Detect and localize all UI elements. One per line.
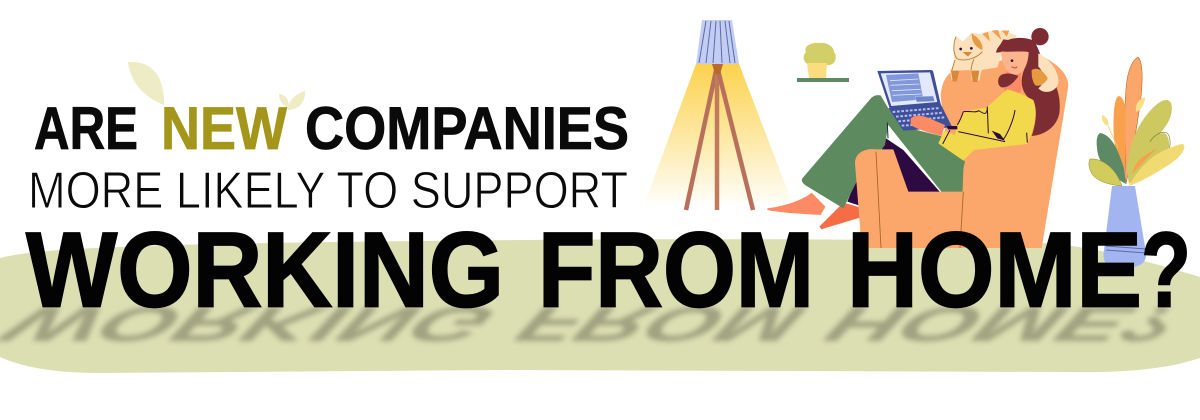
chair arm right	[961, 137, 1042, 248]
title line 3	[26, 210, 1191, 330]
title line 3: HOME	[847, 210, 1142, 330]
armchair, woman, cat, laptop	[767, 55, 1068, 248]
title reflection	[0, 297, 1200, 352]
decorative pale leaves	[128, 62, 305, 110]
laptop	[877, 70, 952, 131]
green leaf	[1097, 133, 1126, 184]
tail curled on chair	[1038, 53, 1059, 92]
green trousers	[802, 95, 965, 208]
pale yellow right leaf	[1129, 144, 1184, 186]
orange accent on leaf	[1132, 148, 1157, 174]
yellow sweater	[938, 89, 1035, 161]
olive round leaf outline	[1150, 132, 1170, 150]
yellow-olive left leaf	[1089, 159, 1122, 186]
chair back	[941, 55, 1068, 248]
title line 1: COMPANIES	[305, 95, 629, 162]
vase body	[1103, 186, 1146, 267]
olive large leaf	[1127, 100, 1172, 184]
title line 1	[34, 95, 629, 162]
hair bun	[1031, 28, 1049, 45]
floor lamp	[645, 20, 792, 210]
title reflection: HOME	[806, 297, 1152, 352]
shelf with potted plant	[797, 43, 849, 82]
face	[1001, 50, 1029, 75]
feet	[767, 193, 825, 215]
lamp shade	[696, 20, 739, 64]
lamp legs	[686, 66, 753, 210]
chair arm left	[855, 149, 963, 248]
title reflection: FROM	[497, 297, 824, 352]
orange tall leaf	[1125, 57, 1142, 184]
small buds	[1136, 97, 1145, 112]
dark trouser lining	[847, 178, 867, 206]
hand	[911, 116, 945, 136]
lamp light cone	[645, 64, 792, 202]
vase plant	[1089, 57, 1184, 267]
woman's hair, back	[996, 38, 1060, 136]
title line 1: ARE	[34, 95, 138, 162]
sleeve cuff hint	[947, 126, 957, 129]
title reflection: WORKING	[0, 297, 514, 352]
title line 3: FROM	[538, 210, 814, 330]
title line 2: MORE LIKELY TO SUPPORT	[28, 162, 628, 220]
ground blob	[0, 239, 1200, 373]
title line 3: WORKING	[26, 210, 504, 330]
neck	[1004, 72, 1022, 95]
title	[0, 95, 1200, 352]
cat	[950, 30, 1017, 82]
title line 1: NEW	[161, 95, 287, 162]
orange short leaf	[1113, 96, 1126, 182]
